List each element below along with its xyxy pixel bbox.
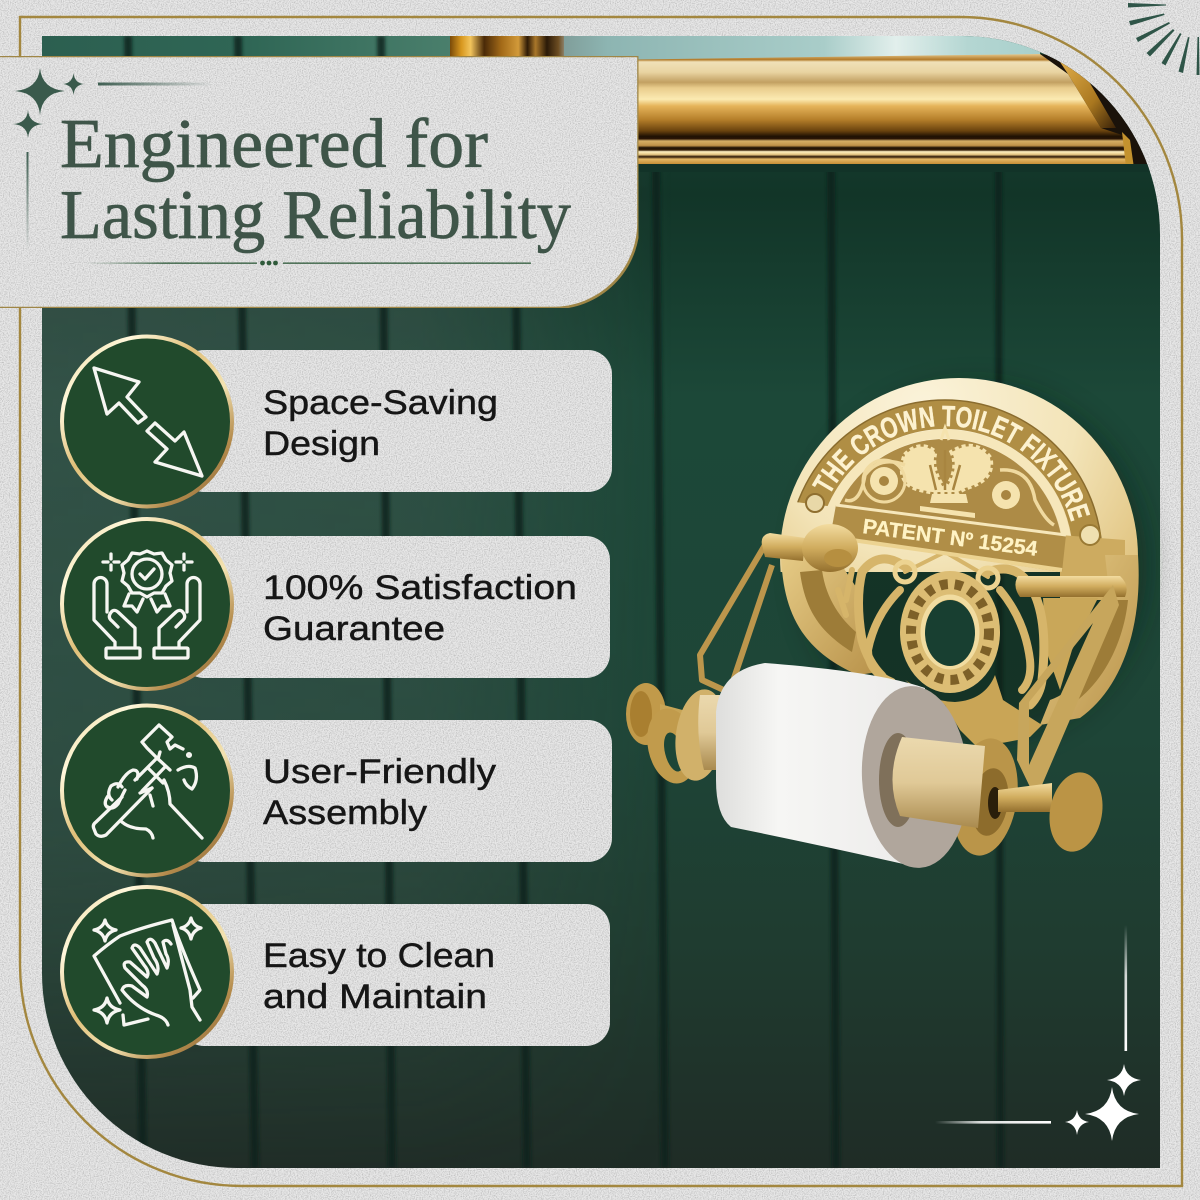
label: Assembly [263, 794, 427, 832]
label [263, 937, 495, 1016]
stars [1065, 1064, 1141, 1141]
upper disc [780, 378, 1138, 572]
icon: hand with hammer [93, 725, 202, 838]
title accent line top [98, 82, 213, 86]
pill [180, 904, 610, 1046]
sparkles bottom right [935, 925, 1141, 1141]
engraved text band [797, 399, 1102, 538]
label: 100% Satisfaction [263, 569, 577, 607]
label [263, 753, 496, 832]
scroll curls [895, 562, 998, 588]
crown ornament [902, 428, 991, 518]
patent bar [830, 505, 1066, 572]
right collar and knob [945, 734, 1109, 860]
screw right [1080, 525, 1100, 545]
feature row 4: cleaning [62, 887, 610, 1057]
hinge knuckle [802, 524, 858, 572]
label: Space-Saving [263, 384, 498, 422]
lower centre scrollwork [905, 675, 1042, 745]
label [263, 384, 498, 463]
brass back plate [780, 378, 1139, 745]
right arm [1015, 576, 1127, 787]
right shoulder behind roller [1060, 535, 1125, 600]
flower left [863, 460, 905, 502]
left lower lobe [781, 555, 878, 675]
accent line vertical [1124, 925, 1127, 1051]
accent line horizontal [935, 1121, 1051, 1124]
wall shadow [803, 387, 1147, 743]
title accent line left [26, 152, 28, 252]
pill [180, 720, 612, 862]
right lower lobe [1040, 555, 1139, 725]
title sparkles [13, 68, 84, 138]
heading divider [85, 261, 531, 265]
left spindle end [626, 683, 735, 788]
heading line 1: Engineered for [60, 106, 488, 183]
gold mirror frame [600, 54, 1165, 172]
pill [180, 536, 610, 678]
label: Easy to Clean [263, 937, 495, 975]
title panel [0, 56, 638, 308]
left arm [700, 524, 858, 692]
toilet roll holder illustration [626, 378, 1166, 868]
patent number text: PATENT Nº 15254 [861, 515, 1039, 561]
mirror glass [564, 36, 1040, 60]
spindle through roll [892, 737, 985, 828]
right feather ornament [1043, 598, 1098, 690]
badge [62, 706, 232, 876]
gold mirror post [450, 36, 564, 58]
feature row 2: guarantee [62, 519, 610, 689]
badge [62, 887, 232, 1057]
label [263, 569, 577, 648]
icon: diagonal double arrow [94, 368, 202, 476]
plate inscription: THE CROWN TOILET FIXTURE [812, 406, 1090, 522]
flower right [992, 470, 1054, 525]
feature row 1: space-saving [62, 336, 612, 506]
icon: hands holding rosette [94, 551, 200, 658]
screw left [806, 494, 824, 512]
corner rays top right [1128, 3, 1200, 75]
badge [62, 519, 232, 689]
central medallion [900, 571, 1000, 693]
label: Design [263, 425, 380, 463]
label: and Maintain [263, 978, 487, 1016]
icon: hand wiping with cloth [94, 918, 201, 1025]
label: User-Friendly [263, 753, 496, 791]
paper roll [716, 663, 973, 871]
heading line 2: Lasting Reliability [60, 177, 571, 254]
badge [62, 336, 232, 506]
label: Guarantee [263, 610, 445, 648]
filigree scrolls [838, 552, 1044, 705]
feature row 3: assembly [62, 706, 612, 876]
pill [180, 350, 612, 492]
